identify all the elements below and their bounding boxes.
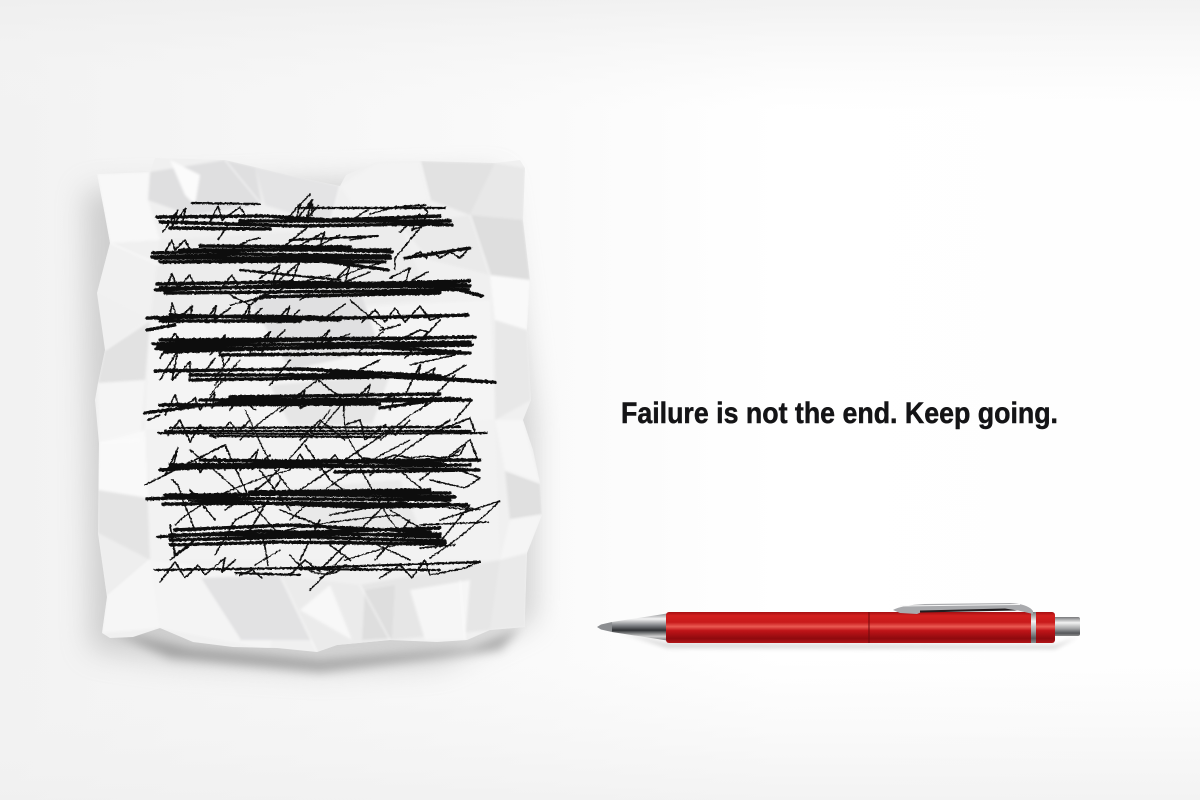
pen tip and chrome cone <box>597 614 667 640</box>
red ballpoint pen <box>597 603 1080 649</box>
pen shadow <box>620 632 1078 649</box>
long loose diagonal strokes <box>175 262 500 590</box>
paper sheet <box>90 150 550 660</box>
red barrel <box>666 612 1055 643</box>
scribbled-out handwriting <box>145 194 500 590</box>
heavy horizontal strike lines <box>145 216 495 545</box>
handwriting ticks <box>145 194 500 582</box>
end cap <box>1055 617 1080 636</box>
paper shadow <box>85 175 535 670</box>
pen clip <box>893 603 1033 614</box>
slogan text: Failure is not the end. Keep going. <box>621 397 1058 430</box>
crumpled paper with scribbles <box>85 150 550 672</box>
